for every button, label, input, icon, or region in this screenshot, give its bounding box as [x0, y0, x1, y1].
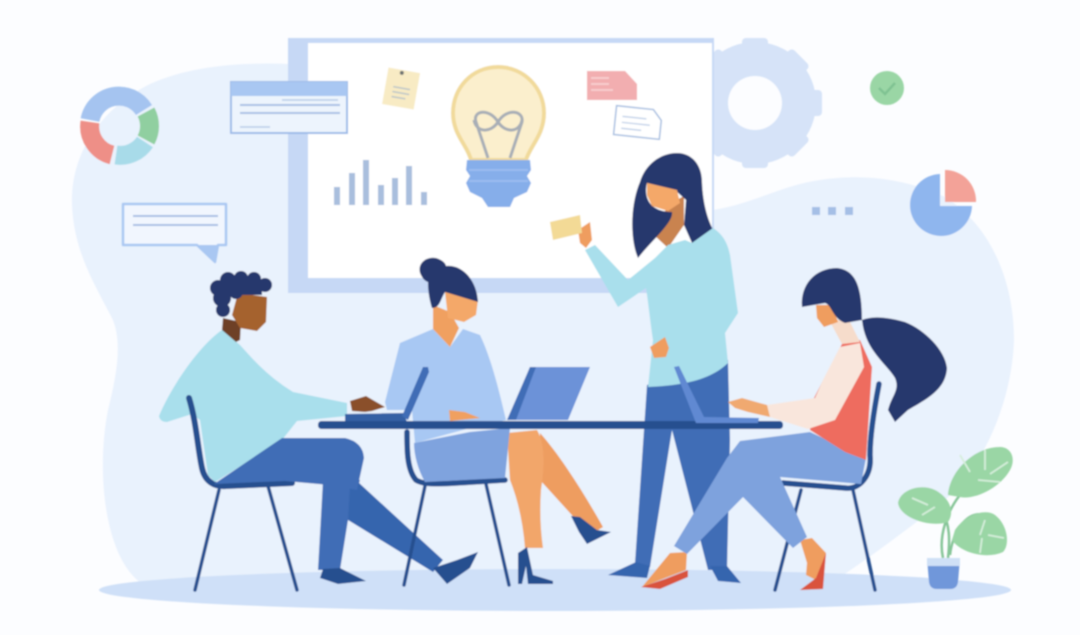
person: man seated left	[159, 271, 478, 590]
laptop: man's	[345, 367, 429, 422]
left foot	[642, 552, 687, 587]
person: woman with bun	[385, 258, 611, 585]
hair	[802, 268, 862, 323]
shoes	[518, 547, 553, 584]
sticky note pink	[587, 71, 637, 100]
background blob	[72, 64, 1014, 590]
face	[445, 292, 478, 322]
hand	[449, 410, 480, 421]
hand	[728, 398, 770, 417]
front hand	[650, 337, 669, 358]
laptop	[508, 367, 590, 420]
laptop: right woman	[674, 366, 759, 423]
table	[318, 421, 783, 429]
chair legs and seat	[195, 468, 297, 590]
hair	[632, 153, 716, 258]
face	[232, 293, 267, 331]
light bulb	[453, 67, 544, 207]
thigh	[214, 438, 364, 490]
sticky note yellow	[382, 68, 420, 110]
shirt	[159, 330, 347, 482]
chair back	[189, 398, 202, 468]
right foot	[800, 538, 826, 582]
donut chart	[90, 96, 150, 155]
shirt	[585, 228, 738, 387]
hair	[420, 258, 478, 308]
left leg	[318, 480, 360, 570]
browser window	[231, 82, 347, 133]
shirt	[385, 329, 506, 443]
right shoe	[800, 553, 826, 590]
neck	[222, 318, 241, 342]
left shoe	[641, 570, 688, 589]
face	[816, 305, 838, 327]
face	[647, 183, 680, 211]
whiteboard	[288, 38, 714, 293]
chair	[404, 432, 509, 585]
hair	[210, 271, 272, 317]
legs	[635, 360, 730, 570]
chair	[775, 384, 879, 590]
check badge	[870, 71, 904, 105]
skirt	[414, 428, 510, 482]
crossed legs	[540, 433, 603, 535]
card	[550, 215, 582, 240]
three dots	[812, 207, 853, 215]
shoes	[320, 568, 366, 584]
hand	[350, 396, 385, 412]
neck	[654, 196, 684, 248]
vest	[810, 340, 872, 460]
shoes	[608, 562, 650, 578]
ponytail	[862, 317, 947, 422]
pie chart	[910, 170, 976, 236]
speech bubble	[123, 204, 226, 262]
person: standing woman	[550, 153, 741, 583]
trousers	[674, 432, 866, 554]
neck	[828, 318, 860, 344]
right leg	[348, 482, 443, 572]
floor ellipse	[99, 569, 1011, 611]
bar chart on whiteboard	[334, 160, 427, 205]
arm and blouse	[767, 343, 864, 429]
plant	[898, 447, 1013, 589]
person: woman with ponytail	[641, 268, 947, 590]
sticky note white	[614, 106, 662, 139]
gear icon	[690, 38, 822, 168]
card hand	[578, 222, 592, 248]
neck	[433, 305, 459, 347]
